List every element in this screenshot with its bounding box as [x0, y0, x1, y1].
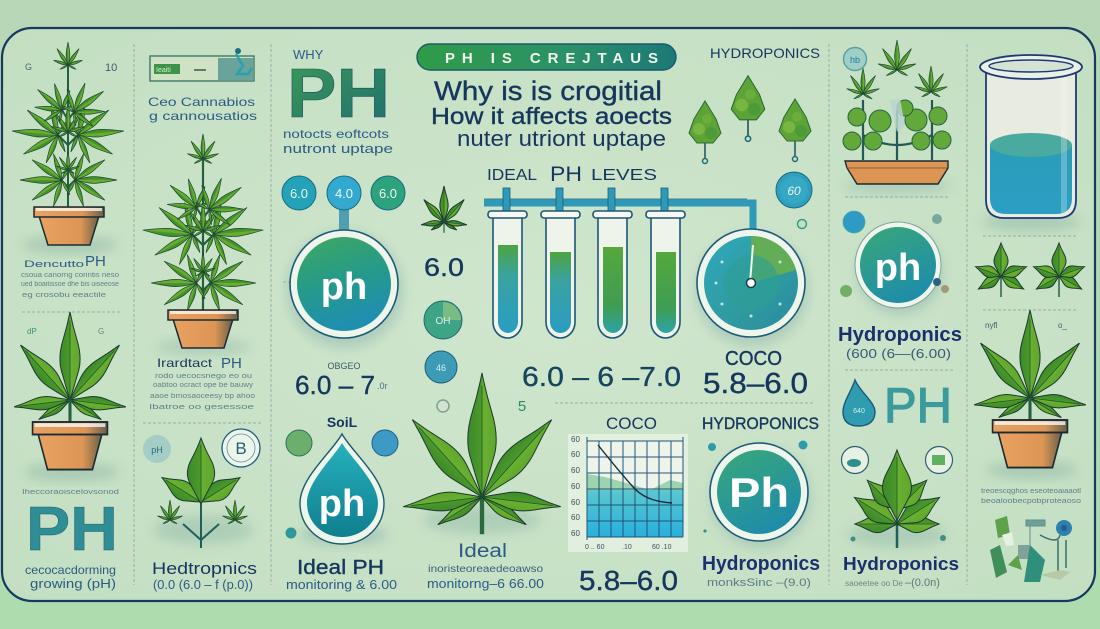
small icons above right leaf: [985, 321, 1067, 330]
small leaf and 6.0: [421, 186, 467, 282]
pH water drop: [300, 434, 388, 545]
small green dot: [798, 220, 806, 228]
potted plants top-right: [842, 40, 952, 193]
coco line chart: 60: [571, 529, 580, 538]
plant 2 in pot: [140, 134, 266, 354]
B bubbles: B: [235, 439, 247, 458]
hedtropnics caption: [152, 559, 257, 592]
ideal pH caption: Irardtact: [157, 356, 213, 370]
pH gauge: [696, 229, 808, 346]
OH bubble: [424, 301, 462, 339]
tiny icons near pH circle: [703, 440, 808, 533]
round icons above right leaf: [842, 446, 952, 474]
small center icons: 46: [436, 363, 446, 373]
hedtropnics caption: (0.0 (6.0 – f (p.0)): [153, 577, 253, 592]
potted cannabis leaf left: [13, 312, 127, 480]
ideal monitoring caption: Ideal: [458, 541, 507, 562]
why pH block: notocts eoftcots: [283, 127, 389, 141]
ideal monitoring caption: [427, 541, 544, 591]
soil side bubbles: [286, 430, 398, 538]
bubbles around right pH circle: [840, 211, 949, 297]
coco line chart: 60 .10: [652, 544, 672, 551]
60 bubble: 60: [787, 184, 801, 198]
drop with PH: PH: [884, 379, 952, 433]
ideal pH monitoring caption: monitoring & 6.00: [286, 577, 397, 592]
badge meter: [150, 48, 254, 81]
plant 1 in pot: [10, 42, 126, 253]
coco line chart: 60: [571, 482, 580, 491]
hydroponics caption lower right: [843, 554, 959, 589]
OH bubble: OH: [436, 316, 450, 327]
ideal pH levels heading: LEVES: [591, 167, 657, 184]
soil range: [295, 361, 388, 430]
drop with PH: 640: [853, 408, 865, 415]
soil range: .0r: [377, 381, 388, 391]
drop with PH: [843, 379, 952, 433]
soil range: 6.0 – 7: [295, 370, 375, 400]
ideal pH caption: Ibatroe oo gesessoe: [149, 404, 254, 411]
ideal pH caption: oabtoo ocract ope be bauwy: [153, 382, 254, 389]
why pH block: PH: [287, 54, 390, 132]
ideal pH levels heading: IDEAL: [487, 167, 537, 184]
pH circle right: [855, 222, 942, 314]
coco range: 5.8–6.0: [703, 368, 808, 400]
value bubbles: 6.0: [290, 186, 308, 201]
right fine print: beoaloobecpobproteaoso: [981, 498, 1081, 505]
value bubbles: [282, 176, 405, 232]
ideal pH caption: PH: [221, 355, 242, 372]
soil range: SoiL: [327, 414, 358, 430]
right fine print: treoescqghos eseoteoaiaaotl: [981, 488, 1081, 495]
PH teal heading with caption: Iheccoraoiscelovsonod: [22, 489, 119, 496]
plant 1 small labels: [25, 62, 117, 74]
ideal pH levels heading: PH: [550, 163, 582, 186]
value bubbles: 6.0: [379, 186, 397, 201]
coco line chart: 60: [571, 435, 580, 444]
small icons left: G: [98, 327, 104, 336]
ideal pH monitoring caption: [286, 557, 397, 592]
pH circle right: ph: [875, 247, 921, 289]
hydroponics plant lower-left: [153, 438, 253, 548]
three hydroponic buds: [689, 76, 811, 164]
small icons above right leaf: o_: [1058, 321, 1067, 330]
value bubbles: 4.0: [335, 186, 353, 201]
hydroponics leaf right: [847, 450, 947, 548]
test tubes with pipe: [484, 188, 753, 338]
coco line chart: 60: [571, 466, 580, 475]
small icons above right leaf: nyfl: [985, 321, 998, 330]
main heading: nuter utriont uptape: [457, 126, 666, 151]
hydroponics heading over pH: HYDROPONICS: [702, 414, 819, 433]
pH circle large: [287, 230, 403, 348]
title pill: [417, 44, 676, 70]
ideal pH caption: aaoe bmosaoceesy bp ahoo: [150, 393, 255, 400]
badge meter: Ieaiti: [156, 67, 171, 74]
plant 1 small labels: G: [25, 62, 32, 72]
main heading: [431, 76, 672, 151]
coco heading: COCO: [606, 414, 657, 433]
bubble above plants: hb: [850, 55, 860, 65]
PH teal heading with caption: PH: [26, 495, 118, 564]
coco line chart: [568, 434, 688, 552]
right fine print: [981, 488, 1081, 505]
pH water drop: ph: [319, 483, 365, 525]
ideal monitoring caption: monitorng–6 66.00: [427, 576, 544, 591]
plant 1 caption: PH: [85, 253, 106, 270]
hydroponics heading right: Hydroponics: [838, 324, 962, 346]
hydroponics caption bottom: monksSinc –(9.0): [707, 577, 811, 589]
hydroponics heading right: [838, 324, 962, 361]
ideal monitoring caption: inoristeoreaedeoawso: [428, 564, 544, 575]
main heading: How it affects aoects: [431, 103, 672, 129]
plant 1 small labels: 10: [105, 62, 117, 74]
equipment illustration: [990, 516, 1072, 582]
cannabis text: g cannousatios: [149, 109, 257, 123]
cannabis text: Ceo Cannabios: [148, 95, 255, 109]
hedtropnics caption: Hedtropnics: [152, 559, 257, 578]
hydroponics caption lower right: Hydroponics: [843, 554, 959, 574]
60 bubble: [776, 172, 812, 208]
hydroponics heading right: (600 (6—(6.00): [846, 346, 951, 361]
ideal pH monitoring caption: Ideal PH: [297, 557, 384, 579]
coco line chart: 0 .. 60: [585, 544, 605, 551]
main heading: Why is is crogitial: [434, 76, 662, 106]
small center icons: [425, 351, 526, 415]
hydroponics caption lower right: –(0.0n): [905, 577, 940, 589]
pH circle large: ph: [321, 266, 367, 308]
ideal pH caption: rodo uecocsnego eo ou: [155, 373, 252, 380]
plant 1 caption: [21, 253, 119, 299]
B bubbles: [143, 429, 260, 467]
PH teal heading with caption: growing (pH): [30, 576, 116, 591]
cannabis text: [148, 95, 257, 123]
bubble above plants: [844, 48, 866, 70]
ideal pH caption: [149, 355, 255, 411]
pH circle lower: [710, 443, 811, 548]
big cannabis leaf: [402, 373, 562, 534]
ideal pH levels heading: [487, 163, 657, 186]
two leaves right: [974, 243, 1086, 297]
PH teal heading with caption: cecocacdorming: [25, 563, 116, 577]
coco line chart: 60: [571, 513, 580, 522]
why pH block: [283, 47, 393, 156]
hydroponics caption bottom: [702, 553, 820, 589]
small center icons: 5: [518, 398, 526, 415]
coco range: [703, 348, 808, 400]
B bubbles: pH: [151, 445, 163, 455]
title pill: PH IS CREJTAUS: [445, 50, 658, 67]
coco line chart: .10: [622, 544, 632, 551]
plant 1 caption: csoua canorng corintis neso: [21, 272, 119, 279]
why pH block: nutront uptape: [283, 141, 393, 156]
coco line chart: 60: [571, 498, 580, 507]
hydroponics label: HYDROPONICS: [710, 45, 820, 61]
small icons left: dP: [27, 327, 37, 336]
hydroponics caption bottom: Hydroponics: [702, 553, 820, 575]
plant 1 caption: Dencutto: [24, 259, 84, 269]
plant 1 caption: eg crosobu eeactile: [22, 292, 106, 299]
beaker: [980, 55, 1082, 230]
plant 1 caption: ued boaitissoe dhe bis uiseeose: [21, 281, 119, 288]
why pH block: WHY: [293, 47, 324, 62]
pH circle lower: Ph: [729, 469, 789, 516]
coco range: COCO: [725, 348, 782, 370]
center range: 6.0 – 6 –7.0: [522, 361, 681, 392]
coco line chart: 60: [571, 450, 580, 459]
potted cannabis leaf right: [973, 310, 1087, 478]
hydroponics caption lower right: saoeetee oo De: [845, 579, 904, 588]
soil range: OBGEO: [327, 361, 361, 371]
coco lower range: 5.8–6.0: [579, 565, 678, 596]
PH teal heading with caption: [22, 489, 119, 591]
small icons left: [27, 327, 104, 336]
small leaf and 6.0: 6.0: [424, 254, 464, 282]
